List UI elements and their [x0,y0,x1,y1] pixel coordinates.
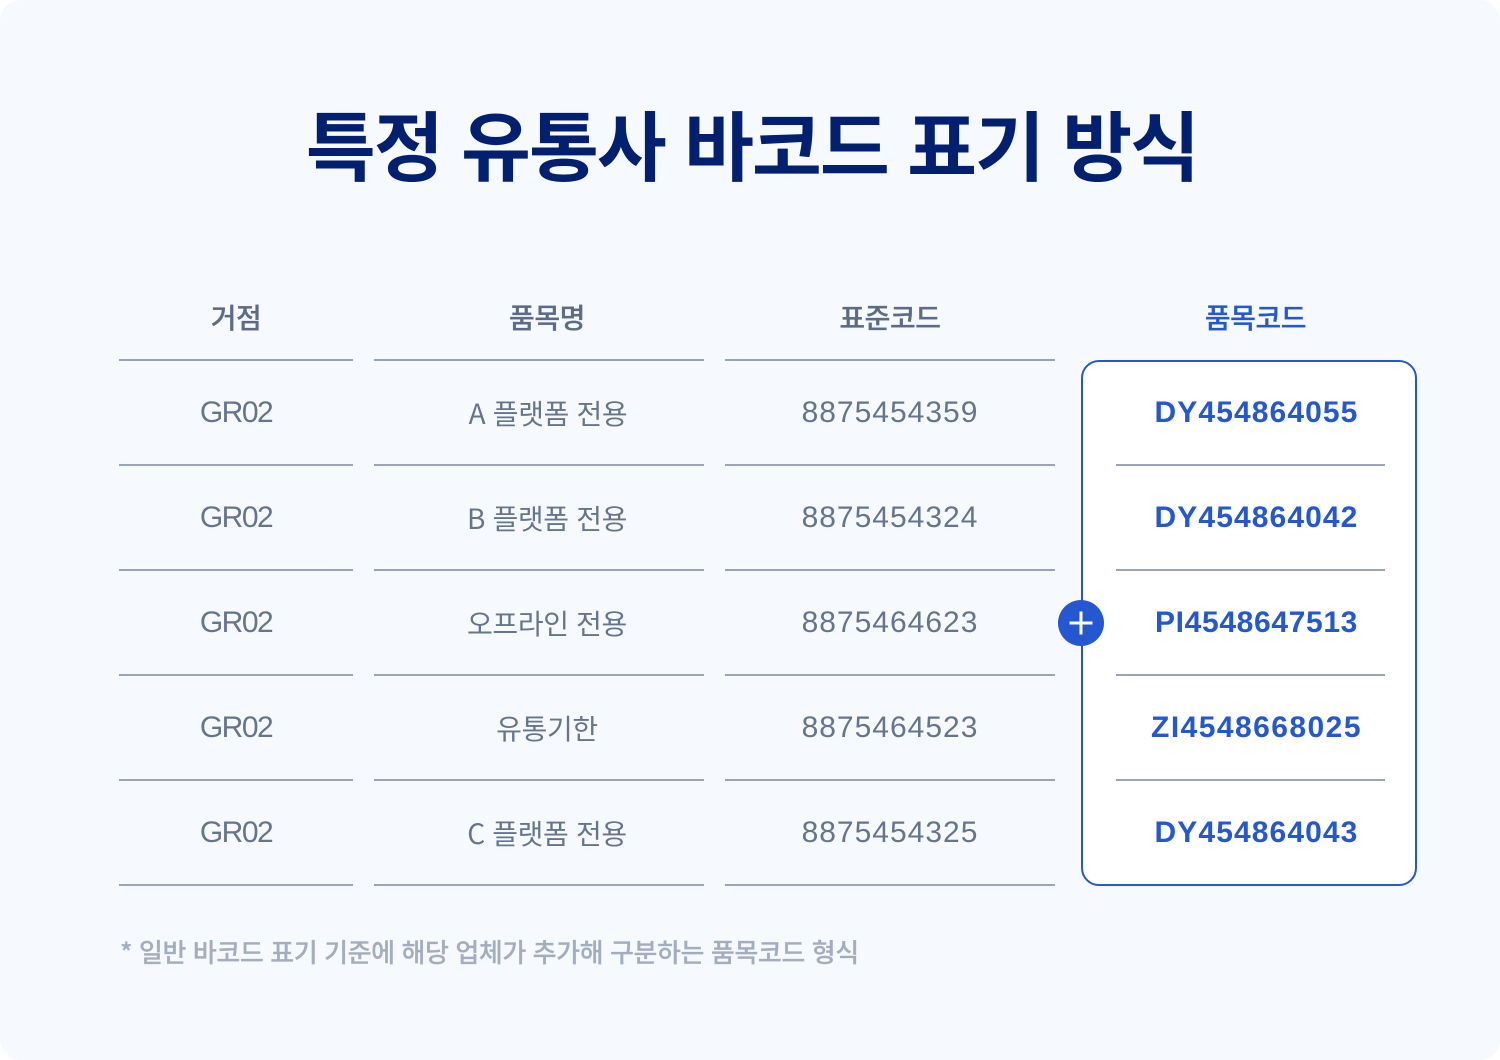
cell: 오프라인 전용: 오프라인 전용 [467,603,627,643]
cell: DY454864043: DY454864043 [1155,816,1358,849]
cell: ZI4548668025: ZI4548668025 [1151,710,1362,744]
heading: 품목코드: 품목코드 [1205,297,1306,337]
heading: 거점: 거점 [211,297,261,337]
cell: GR02 row 1: GR02 [200,396,272,429]
panel: highlighted item code box [1081,360,1416,886]
heading: 표준코드: 표준코드 [839,297,941,337]
footnote: * 일반 바코드 표기 기준에 해당 업체가 추가해 구분하는 품목코드 형식 [120,933,859,970]
cell: C 플랫폼 전용: C 플랫폼 전용 [467,813,627,853]
cell: PI4548647513: PI4548647513 [1155,606,1358,639]
cell: 8875454359: 8875454359 [802,396,978,429]
cell: GR02 row 5: GR02 [200,816,272,849]
icon: plus badge [1058,600,1104,646]
cell: GR02 row 3: GR02 [200,606,272,639]
cell: GR02 row 4: GR02 [200,711,272,744]
cell: GR02 row 2: GR02 [200,501,272,534]
cell: DY454864042: DY454864042 [1155,501,1358,534]
cell: A 플랫폼 전용: A 플랫폼 전용 [469,393,627,433]
cell: 8875464523: 8875464523 [802,711,978,744]
cell: DY454864055: DY454864055 [1155,396,1358,429]
cell: 8875454325: 8875454325 [802,816,978,849]
cell: 유통기한: 유통기한 [496,708,598,748]
title: 특정 유통사 바코드 표기 방식 [306,87,1198,197]
cell: 8875454324: 8875454324 [802,501,978,534]
cell: 8875464623: 8875464623 [802,606,978,639]
cell: B 플랫폼 전용: B 플랫폼 전용 [467,498,627,538]
heading: 품목명: 품목명 [509,297,585,337]
